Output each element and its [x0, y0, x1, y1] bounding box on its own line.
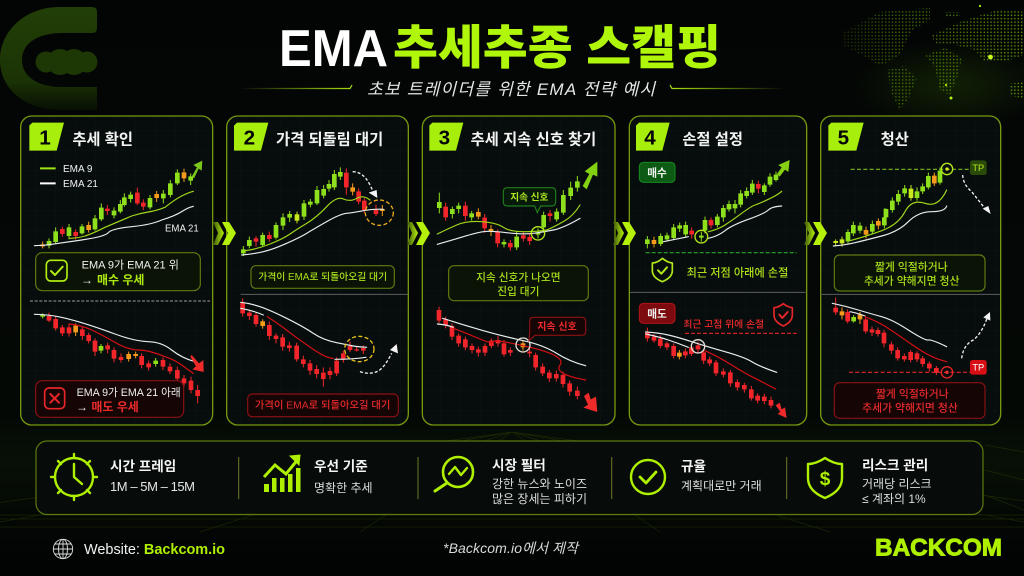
callout: sell bias: 매도 우세: [91, 399, 139, 414]
callout: buy bias: 매수 우세: [97, 272, 144, 287]
title: 추세추종 스캘핑: [393, 9, 721, 78]
chart: pullback in uptrend: [242, 167, 393, 256]
callout: pullback wait sell: 가격이 EMA로 되돌아오길 대기: [255, 398, 390, 411]
risk text: [862, 458, 932, 506]
callout: buy bias: [36, 253, 200, 291]
callout: signal red: 지속 신호: [537, 320, 577, 333]
footer logo: BACKCOM: [875, 534, 1002, 562]
callout: close buy: 추세가 약해지면 청산: [864, 275, 960, 288]
callout: close sell: [834, 383, 985, 418]
heading 5: 청산: [881, 131, 909, 148]
legend: EMA 21: [63, 179, 98, 190]
icon: shield dollar: $: [820, 469, 831, 490]
discipline text: [681, 459, 762, 493]
panel 1: trend confirmation: [21, 116, 213, 425]
footer credit: *Backcom.io에서 제작: [443, 540, 580, 556]
callout: wait entry: [449, 266, 588, 301]
step badge 5: [828, 123, 864, 151]
TP tag red: TP: [972, 363, 984, 373]
buy tag: 매수: [647, 166, 667, 179]
icon: red shield: [774, 304, 792, 326]
bottom rules panel: [36, 441, 983, 514]
panel 5: take profit: [820, 116, 1001, 425]
panel 2: pullback wait: [227, 116, 408, 425]
footer website: Website: Backcom.io: [84, 542, 225, 558]
icon: rising chart: [264, 455, 300, 492]
priority text: 우선 기준: [314, 459, 368, 474]
callout: signal green: 지속 신호: [510, 192, 549, 204]
heading 4: 손절 설정: [682, 131, 743, 148]
icon: check circle: [631, 460, 665, 494]
callout: close sell: 짧게 익절하거나: [876, 387, 949, 401]
discipline text: 계획대로만 거래: [681, 479, 762, 493]
callout: sell bias: [36, 381, 184, 417]
heading 1: 추세 확인: [72, 131, 133, 148]
chart: continuation down: [437, 307, 597, 412]
priority text: [314, 459, 373, 495]
callout: close sell: 추세가 약해지면 청산: [862, 402, 958, 415]
world map: [842, 4, 1024, 115]
callout: sell bias: EMA 9가 EMA 21 아래: [77, 387, 181, 399]
heading 3: 추세 지속 신호 찾기: [471, 131, 596, 148]
buy tag: [639, 162, 675, 182]
callout: close buy: [834, 255, 985, 291]
TP tag green: TP: [972, 163, 984, 173]
step badge 3: [429, 123, 463, 151]
TP tag green: [970, 160, 987, 175]
callout: wait entry: 지속 신호가 나오면: [476, 272, 561, 284]
callout: pullback wait buy: [251, 266, 394, 288]
chart: buy stop: [646, 160, 797, 253]
step badge 1: [29, 123, 64, 151]
icon: shield dollar: [808, 458, 842, 498]
chart: uptrend: [34, 161, 202, 248]
step badge 5: 5: [838, 126, 849, 149]
step badge 4: 4: [644, 126, 656, 149]
chart: continuation up: [437, 162, 597, 251]
logo watermark: [0, 7, 98, 110]
icon: clock: [51, 454, 97, 500]
title: EMA: [279, 20, 388, 78]
time frame text: [110, 459, 195, 494]
market filter text: 많은 장세는 피하기: [492, 492, 587, 506]
stop text sell: 최근 고점 위에 손절: [683, 318, 764, 331]
background perspective grid: [0, 432, 1024, 532]
discipline text: 규율: [681, 459, 706, 474]
stop text buy: 최근 저점 아래에 손절: [687, 266, 788, 280]
chart: take profit down: [832, 298, 990, 378]
time frame text: 1M – 5M – 15M: [110, 479, 195, 494]
market filter text: [492, 458, 587, 506]
step badge 4: [636, 123, 670, 151]
subtitle: 초보 트레이더를 위한 EMA 전략 예시: [367, 80, 656, 99]
priority text: 명확한 추세: [314, 481, 373, 495]
chart: take profit up: [833, 160, 991, 247]
step badge 3: 3: [439, 126, 450, 149]
risk text: ≤ 계좌의 1%: [862, 492, 926, 506]
sell tag: 매도: [647, 307, 667, 320]
legend: EMA 9: [63, 164, 93, 175]
TP tag red: [970, 360, 987, 375]
callout: buy bias: EMA 9가 EMA 21 위: [82, 259, 179, 272]
callout: sell bias: →: [76, 400, 88, 414]
callout: buy bias: →: [81, 273, 93, 287]
callout: signal red: [529, 317, 586, 341]
risk text: 리스크 관리: [862, 458, 928, 473]
panel 4: stop loss: [629, 116, 807, 425]
callout: pullback wait sell: [248, 394, 398, 417]
footer website: [53, 539, 225, 559]
market filter text: 시장 필터: [492, 458, 546, 473]
chart: uptrend: EMA 21: [165, 223, 199, 234]
chart: sell stop: [646, 328, 797, 418]
callout: pullback wait buy: 가격이 EMA로 되돌아오길 대기: [258, 270, 387, 283]
sell tag: [639, 303, 675, 323]
chart: pullback in downtrend: [241, 298, 398, 387]
market filter text: 강한 뉴스와 노이즈: [492, 477, 587, 491]
time frame text: 시간 프레임: [110, 459, 176, 474]
legend: [40, 164, 98, 190]
subtitle: [240, 80, 785, 99]
callout: signal green: [503, 188, 556, 213]
icon: lime shield: [652, 258, 672, 282]
heading 2: 가격 되돌림 대기: [276, 131, 383, 148]
risk text: 거래당 리스크: [862, 477, 932, 491]
chevrons between panels: [213, 222, 827, 245]
callout: close buy: 짧게 익절하거나: [875, 260, 948, 274]
step badge 2: [234, 123, 268, 151]
callout: wait entry: 진입 대기: [497, 285, 539, 298]
chart: downtrend: [34, 313, 204, 403]
icon: magnifier: [435, 457, 473, 491]
step badge 2: 2: [244, 126, 255, 149]
step badge 1: 1: [39, 126, 51, 149]
panel 3: continuation signal: [422, 116, 615, 425]
